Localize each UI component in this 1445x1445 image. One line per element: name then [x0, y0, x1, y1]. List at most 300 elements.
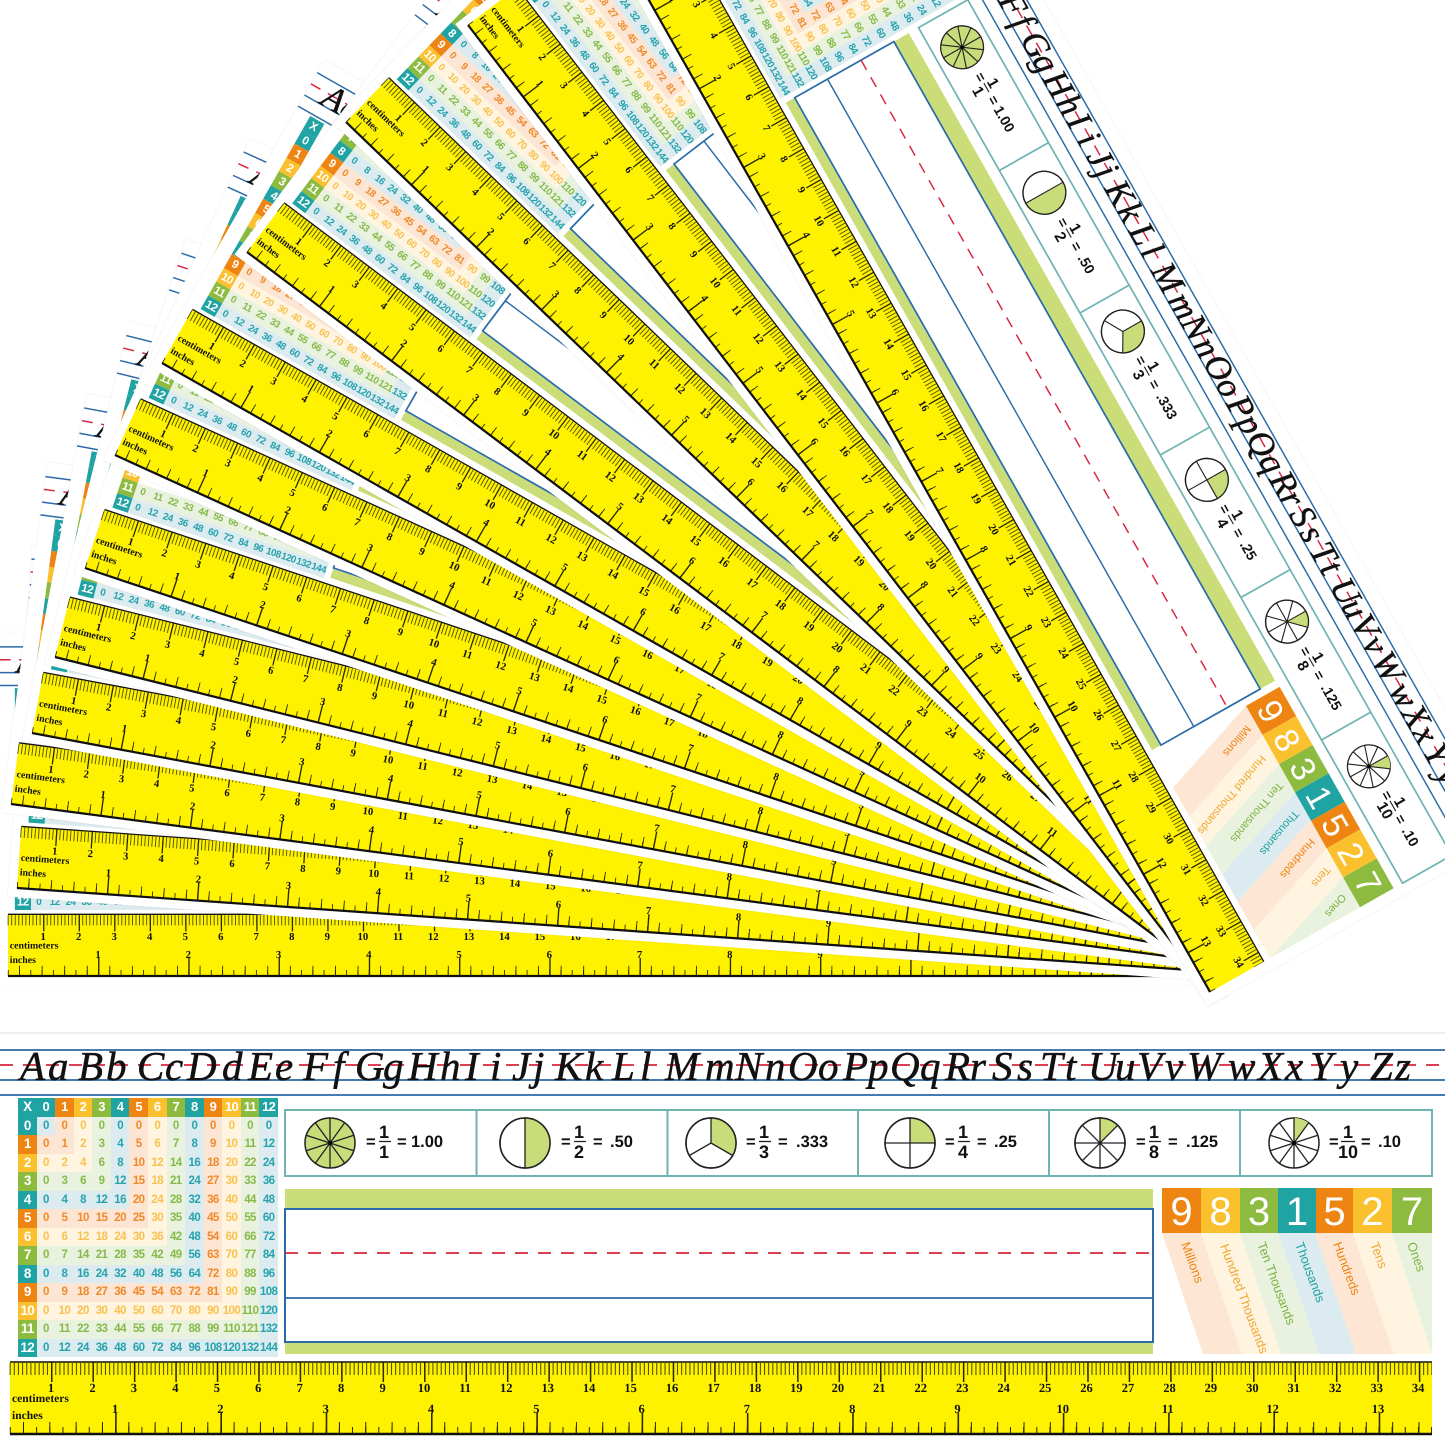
fractions panel: =: [397, 1133, 407, 1151]
ruler: 1 2 3 4 5 6 7 8 9: [70, 694, 357, 759]
multiplication table: 12: [17, 895, 29, 908]
multiplication table: 5: [41, 697, 48, 711]
multiplication table: 77: [593, 147, 608, 161]
multiplication table: 72: [616, 147, 630, 161]
multiplication table: 90: [359, 350, 372, 364]
multiplication table: 7: [481, 38, 491, 49]
multiplication table: 132: [241, 1342, 259, 1354]
multiplication table: 55: [246, 412, 259, 426]
multiplication table: 10: [225, 1099, 238, 1114]
multiplication table: 72: [301, 354, 315, 368]
multiplication table: 72: [207, 1268, 219, 1280]
multiplication table: 11: [158, 371, 174, 387]
multiplication table: 132: [264, 628, 281, 642]
multiplication table: 144: [260, 1342, 277, 1354]
multiplication table: 0: [359, 142, 369, 154]
multiplication table: 36: [263, 1175, 274, 1187]
multiplication table: 24: [558, 22, 572, 37]
multiplication table: 0: [62, 1120, 67, 1132]
multiplication table: 2: [220, 242, 231, 256]
multiplication table: 33: [147, 582, 159, 595]
multiplication table: 96: [705, 110, 719, 124]
place value chart: Thousands: [1292, 1240, 1328, 1304]
multiplication table: 7: [187, 314, 198, 328]
multiplication table: 1: [46, 634, 53, 647]
multiplication table: 40: [411, 201, 425, 216]
multiplication table: 120: [479, 292, 497, 309]
multiplication table: 6: [62, 1230, 67, 1242]
multiplication table: 28: [114, 1249, 126, 1261]
multiplication table: 132: [220, 823, 235, 834]
multiplication table: 45: [401, 214, 415, 228]
multiplication table: 27: [376, 195, 390, 209]
multiplication table: 80: [189, 1304, 200, 1316]
multiplication table: 48: [691, 40, 706, 54]
multiplication table: 21: [170, 1175, 182, 1187]
multiplication table: 81: [366, 336, 380, 350]
multiplication table: 96: [416, 346, 430, 360]
place value chart: Ones: [1322, 892, 1349, 920]
ruler: 10 11 12 13 14 15 16 17 18 19 20 21 22 23 24 25 26 27 28 29 30 31 32 33 34: [811, 213, 1247, 971]
ruler: 1 2 3 4 5 6 7 8 9: [95, 621, 378, 702]
fractions panel: =: [1145, 377, 1163, 392]
fractions panel: 4: [1213, 515, 1232, 531]
multiplication table: 90: [802, 30, 816, 44]
multiplication table: 60: [263, 1212, 274, 1224]
fractions panel: .10: [1378, 1133, 1401, 1151]
multiplication table: 96: [500, 268, 514, 283]
multiplication table: 72: [676, 72, 690, 86]
multiplication table: 66: [227, 516, 240, 529]
multiplication table: 63: [644, 57, 658, 71]
multiplication table: 132: [240, 692, 256, 704]
multiplication table: 4: [117, 1138, 123, 1150]
fractions panel: 1: [1390, 794, 1409, 810]
multiplication table: 77: [751, 4, 765, 18]
fan strip 8: [150, 60, 1239, 933]
multiplication table: 14: [170, 1156, 182, 1168]
multiplication table: 9: [210, 1099, 216, 1114]
multiplication table: 88: [224, 602, 236, 614]
multiplication table: 88: [515, 160, 529, 174]
fractions panel: 1: [1144, 358, 1163, 374]
multiplication table: 30: [133, 1230, 144, 1242]
multiplication table: 144: [548, 213, 566, 231]
multiplication table: 5: [136, 1138, 142, 1150]
multiplication table: 108: [406, 359, 424, 375]
multiplication table: 0: [210, 1120, 216, 1132]
fractions panel: 1: [1149, 1122, 1159, 1142]
multiplication table: 12: [151, 1156, 163, 1168]
multiplication table: X: [23, 1099, 31, 1114]
multiplication table: 56: [458, 217, 473, 232]
multiplication table: 6: [74, 562, 82, 576]
multiplication table: 108: [295, 452, 313, 467]
fractions panel: 10: [1373, 799, 1397, 822]
multiplication table: 12: [112, 590, 124, 603]
multiplication table: 50: [133, 1304, 144, 1316]
multiplication table: 60: [622, 54, 636, 68]
multiplication table: 81: [452, 252, 466, 267]
multiplication table: 30: [276, 303, 289, 317]
multiplication table: 99: [767, 32, 781, 45]
multiplication table: 33: [357, 220, 371, 234]
multiplication table: 84: [493, 160, 507, 174]
place value chart: 7: [1346, 866, 1388, 901]
multiplication table: 70: [417, 246, 431, 260]
multiplication table: 60: [317, 326, 331, 340]
place value chart: Millions: [1178, 1240, 1207, 1285]
multiplication table: 11: [305, 180, 322, 197]
multiplication table: 54: [151, 1286, 163, 1298]
multiplication table: 9: [20, 847, 26, 860]
multiplication table: 108: [341, 376, 359, 393]
multiplication table: 121: [376, 378, 394, 395]
multiplication table: 0: [247, 1120, 253, 1132]
place value chart: Hundred Thousands: [1217, 1242, 1272, 1356]
multiplication table: 77: [497, 246, 511, 260]
multiplication table: 10: [33, 776, 46, 790]
multiplication table: 120: [398, 372, 416, 389]
multiplication table: 132: [206, 897, 221, 907]
multiplication table: 9: [210, 1138, 216, 1150]
card: [1, 462, 1275, 974]
multiplication table: 108: [174, 897, 189, 907]
multiplication table: 80: [816, 22, 830, 36]
multiplication table: 0: [43, 1230, 49, 1242]
multiplication table: 63: [822, 0, 836, 14]
multiplication table: 48: [333, 299, 347, 313]
multiplication table: 88: [487, 259, 501, 273]
multiplication table: 24: [263, 1156, 274, 1168]
multiplication table: 84: [179, 680, 191, 692]
multiplication table: 30: [151, 1212, 163, 1224]
multiplication table: 33: [458, 104, 472, 119]
multiplication table: 30: [685, 5, 699, 19]
ruler: centimeters: [489, 5, 527, 50]
multiplication table: 72: [140, 741, 151, 753]
multiplication table: 18: [468, 71, 483, 85]
multiplication table: 121: [241, 1323, 259, 1335]
multiplication table: 144: [460, 318, 478, 335]
multiplication table: 0: [139, 487, 147, 498]
multiplication table: 22: [344, 211, 358, 225]
alphabet guide: [693, 0, 1445, 824]
multiplication table: 6: [253, 216, 264, 230]
multiplication table: 66: [604, 136, 619, 150]
multiplication table: 32: [189, 1194, 200, 1206]
multiplication table: 40: [238, 391, 251, 405]
multiplication table: 8: [68, 593, 76, 607]
multiplication table: 55: [212, 511, 224, 524]
multiplication table: 20: [133, 1194, 144, 1206]
multiplication table: 0: [412, 43, 424, 56]
multiplication table: 0: [340, 168, 350, 179]
multiplication table: 120: [570, 191, 588, 208]
multiplication table: 24: [291, 275, 305, 289]
multiplication table: 4: [374, 93, 386, 107]
multiplication table: 9: [352, 177, 363, 188]
multiplication table: 6: [154, 1099, 161, 1114]
multiplication table: 72: [730, 91, 744, 105]
multiplication table: 12: [114, 1175, 126, 1187]
alphabet guide: [541, 0, 1445, 765]
multiplication table: 3: [44, 666, 50, 679]
fractions panel: 8: [1294, 658, 1313, 674]
alphabet guide: [0, 641, 1238, 685]
alphabet guide: [169, 248, 1358, 683]
multiplication table: 14: [382, 160, 396, 174]
multiplication table: 72: [129, 897, 139, 907]
multiplication table: 48: [360, 242, 374, 257]
multiplication table: 56: [347, 307, 360, 321]
multiplication table: 18: [363, 185, 377, 200]
multiplication table: 72: [597, 73, 611, 87]
place value chart: Ten Thousands: [1228, 780, 1286, 845]
multiplication table: [28, 602, 251, 835]
multiplication table: 16: [189, 1156, 200, 1168]
multiplication table: 11: [332, 201, 345, 215]
multiplication table: [14, 688, 237, 910]
multiplication table: 3: [62, 1175, 67, 1187]
multiplication table: 132: [469, 305, 487, 322]
ruler: 1 2 3 4 5 6 7 8 9: [420, 163, 952, 676]
multiplication table: 0: [182, 366, 191, 377]
card: [598, 0, 1445, 1006]
multiplication table: 0: [48, 729, 54, 740]
multiplication table: 24: [151, 1194, 163, 1206]
multiplication table: 144: [776, 79, 792, 97]
multiplication table: 66: [309, 340, 323, 354]
multiplication table: 10: [125, 464, 140, 480]
place value chart: Ten Thousands: [1254, 1240, 1299, 1327]
multiplication table: 0: [266, 1120, 272, 1132]
multiplication table: 4: [20, 768, 26, 781]
multiplication table: 12: [77, 1230, 89, 1242]
card: [103, 139, 1377, 974]
fractions panel: =: [1132, 353, 1149, 368]
multiplication table: 144: [339, 472, 356, 487]
multiplication table: 99: [683, 107, 697, 121]
multiplication table: 2: [393, 68, 405, 82]
multiplication table: 4: [79, 531, 88, 545]
multiplication table: 6: [44, 631, 52, 644]
multiplication table: 24: [189, 1175, 200, 1187]
multiplication table: 100: [547, 168, 565, 186]
multiplication table: 48: [109, 737, 120, 749]
multiplication table: 36: [117, 669, 129, 681]
multiplication table: 30: [536, 69, 550, 84]
multiplication table: 7: [371, 152, 382, 163]
ruler: 1 2 3 4 5 6 7 8 9: [48, 763, 336, 813]
multiplication table: 80: [526, 148, 540, 162]
ruler: 1 2 3 4 5 6 7 8 9: [95, 949, 823, 961]
multiplication table: 0: [349, 155, 359, 166]
fan strip 5: [44, 322, 1243, 938]
multiplication table: 3: [117, 443, 126, 457]
writing area: [254, 627, 1010, 864]
multiplication table: 0: [221, 308, 230, 319]
multiplication table: 0: [169, 395, 178, 406]
multiplication table: 80: [571, 147, 585, 162]
multiplication table: 21: [395, 170, 409, 184]
multiplication table: 108: [421, 289, 440, 306]
place value chart: 5: [1313, 808, 1356, 843]
multiplication table: [292, 26, 523, 338]
multiplication table: 120: [355, 384, 373, 400]
multiplication table: 12: [50, 897, 60, 907]
multiplication table: 0: [43, 1120, 49, 1132]
multiplication table: [396, 0, 630, 234]
multiplication table: 36: [96, 1342, 107, 1354]
multiplication table: 48: [225, 420, 238, 433]
multiplication table: 18: [77, 1286, 89, 1298]
multiplication table: 108: [188, 821, 203, 832]
multiplication table: 63: [471, 227, 485, 241]
multiplication table: 56: [189, 1249, 200, 1261]
multiplication table: 35: [650, 12, 664, 26]
multiplication table: 21: [502, 59, 516, 73]
multiplication table: 36: [81, 897, 91, 907]
multiplication table: 50: [492, 115, 506, 129]
multiplication table: 77: [619, 76, 633, 90]
ruler: centimeters: [38, 699, 88, 718]
multiplication table: 9: [65, 609, 73, 623]
multiplication table: 0: [311, 206, 321, 217]
fractions panel: 1: [379, 1142, 389, 1162]
multiplication table: 96: [252, 541, 265, 554]
fractions panel: =: [1391, 812, 1409, 827]
multiplication table: 36: [210, 413, 224, 427]
multiplication table: 120: [760, 51, 776, 69]
multiplication table: 84: [509, 256, 523, 270]
multiplication table: 56: [679, 50, 693, 64]
multiplication table: 120: [434, 298, 452, 316]
multiplication table: 6: [24, 1228, 31, 1244]
ruler: inches: [169, 346, 197, 368]
multiplication table: 24: [77, 733, 88, 744]
multiplication table: 4: [48, 600, 56, 613]
multiplication table: 0: [43, 1099, 49, 1114]
multiplication table: 84: [170, 1342, 182, 1354]
multiplication table: 56: [537, 114, 551, 129]
ruler: 1 2 3 4 5 6 7 8 9: [144, 652, 852, 839]
multiplication table: 54: [325, 313, 339, 326]
card: [8, 545, 1268, 983]
multiplication table: 36: [207, 1194, 219, 1206]
multiplication table: 8: [24, 1266, 31, 1280]
multiplication table: 2: [85, 500, 94, 513]
multiplication table: 60: [226, 1230, 237, 1242]
multiplication table: 66: [260, 419, 274, 432]
multiplication table: 12: [86, 663, 97, 675]
multiplication table: 0: [173, 1120, 179, 1132]
multiplication table: 24: [915, 3, 929, 17]
multiplication table: 25: [133, 1212, 144, 1224]
multiplication table: 0: [330, 180, 340, 192]
fractions panel: .333: [796, 1133, 828, 1151]
multiplication table: 45: [625, 31, 639, 45]
card: [74, 239, 1360, 967]
ruler: 1 2 3 4 5 6 7 8 9: [100, 788, 822, 895]
multiplication table: 0: [36, 897, 41, 907]
fractions panel: 2: [1051, 229, 1070, 245]
multiplication table: 96: [594, 169, 608, 184]
card: [234, 0, 1436, 1000]
multiplication table: 72: [189, 1286, 200, 1298]
multiplication table: 11: [59, 1323, 70, 1335]
ruler: [162, 309, 1252, 965]
multiplication table: 66: [720, 78, 735, 92]
multiplication table: 66: [492, 137, 506, 152]
multiplication table: 20: [77, 1304, 89, 1316]
multiplication table: 0: [191, 1120, 197, 1132]
multiplication table: 3: [99, 1138, 104, 1150]
fractions panel: 1: [958, 1122, 968, 1142]
ruler: inches: [12, 1410, 43, 1422]
multiplication table: 0: [244, 267, 254, 278]
ruler: 10 11 12 13 14 15 16 17 18 19 20 21 22 23 24 25 26 27 28 29 30 31 32 33 34: [362, 805, 1219, 929]
lines and ruler: [345, 77, 1251, 939]
multiplication table: 60: [470, 138, 484, 152]
multiplication table: 63: [207, 1249, 219, 1261]
multiplication table: 6: [40, 713, 47, 726]
multiplication table: 30: [96, 1304, 107, 1316]
ruler: 10 11 12 13: [940, 827, 1211, 927]
multiplication table: 1: [20, 721, 26, 733]
multiplication table: 6: [20, 800, 26, 813]
multiplication table: 48: [274, 338, 288, 352]
multiplication table: 81: [663, 82, 678, 96]
multiplication table: 44: [879, 5, 893, 18]
multiplication table: 12: [548, 10, 562, 24]
multiplication table: 3: [24, 1173, 31, 1188]
multiplication table: 90: [310, 424, 324, 438]
place value chart: 8: [1265, 723, 1308, 758]
multiplication table: 7: [24, 1247, 31, 1262]
multiplication table: 5: [62, 1212, 67, 1224]
multiplication table: 90: [226, 1286, 237, 1298]
fractions panel: 1: [574, 1122, 584, 1142]
multiplication table: 99: [638, 101, 652, 115]
multiplication table: 99: [272, 531, 285, 544]
fractions panel: 1: [1343, 1122, 1353, 1142]
multiplication table: 1: [88, 484, 96, 498]
multiplication table: 32: [305, 283, 319, 297]
multiplication table: 110: [466, 283, 484, 300]
fractions panel: .25: [994, 1133, 1017, 1151]
multiplication table: 9: [326, 156, 339, 170]
multiplication table: 8: [237, 243, 249, 257]
multiplication table: 12: [424, 94, 438, 108]
place value chart: Tens: [1367, 1240, 1391, 1270]
multiplication table: 84: [606, 86, 620, 100]
multiplication table: 6: [154, 1138, 160, 1150]
ruler: [115, 399, 1250, 960]
multiplication table: 96: [172, 745, 183, 757]
multiplication table: 6: [492, 27, 502, 38]
ruler: centimeters: [176, 333, 224, 367]
fractions panel: .50: [610, 1133, 633, 1151]
multiplication table: 64: [189, 1268, 200, 1280]
ruler: centimeters: [364, 98, 407, 139]
ruler: [85, 509, 1260, 955]
multiplication table: 132: [260, 1323, 277, 1335]
multiplication table: 120: [634, 121, 651, 139]
multiplication table: 8: [180, 329, 191, 343]
multiplication table: 28: [408, 179, 422, 193]
multiplication table: 0: [178, 315, 188, 329]
